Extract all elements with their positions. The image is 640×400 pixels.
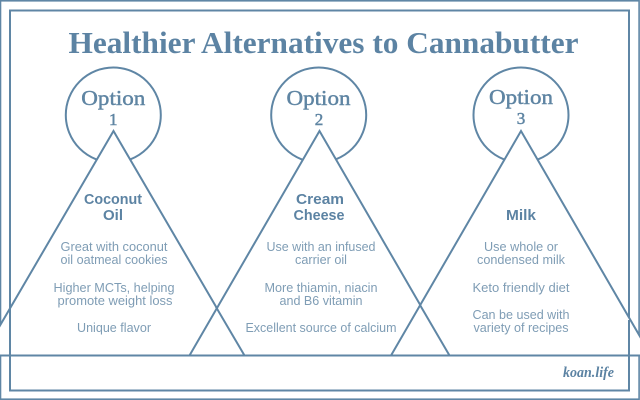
option 1 text: Great with coconut [60, 240, 168, 254]
option 3 text [472, 240, 570, 335]
option 1 text: promote weight loss [58, 294, 172, 308]
option 1 right edge over triangle 2 [216, 307, 244, 356]
option 2 right edge over triangle 3 [420, 305, 450, 356]
option 2 text: Excellent source of calcium [246, 321, 396, 335]
option 2 triangle [190, 131, 450, 356]
option 3 label: 3 [517, 109, 525, 128]
option 1 label [81, 86, 146, 129]
option 3 text: Use whole or [484, 240, 558, 254]
option 1 label: Option [81, 86, 146, 110]
title: Healthier Alternatives to Cannabutter [68, 26, 578, 60]
panel: option 1 [0, 68, 244, 356]
option 3 label: Option [489, 85, 554, 109]
option 2 label: 2 [315, 110, 323, 129]
option 3 text: condensed milk [477, 253, 566, 267]
icon: option 2 circle [271, 68, 366, 162]
option 3 text: variety of recipes [474, 321, 568, 335]
option 2 label: Option [286, 86, 351, 110]
option 1 text: Unique flavor [77, 321, 151, 335]
option 2 heading: Cheese [294, 208, 344, 224]
panel: option 2 [190, 68, 450, 356]
option 1 heading: Coconut [84, 192, 142, 208]
option 2 label [286, 86, 351, 129]
icon: option 3 circle [474, 68, 568, 162]
option 3 text: Keto friendly diet [472, 281, 570, 295]
option 1 text [54, 240, 175, 335]
brand: koan.life [563, 365, 614, 381]
option 3 label [489, 85, 554, 128]
option 2 text: and B6 vitamin [280, 294, 363, 308]
icon: option 1 circle [66, 68, 161, 162]
option 2 text: Use with an infused [266, 240, 376, 254]
option 1 triangle [0, 131, 244, 356]
option 2 heading: Cream [296, 192, 344, 208]
option 3 text: Can be used with [472, 308, 570, 322]
option 2 text: carrier oil [295, 253, 347, 267]
panel: option 3 [391, 68, 640, 356]
option 2 text: More thiamin, niacin [264, 281, 378, 295]
option 3 heading: Milk [506, 208, 537, 224]
option 1 heading [84, 192, 142, 224]
option 1 text: Higher MCTs, helping [54, 281, 175, 295]
option 1 text: oil oatmeal cookies [60, 253, 168, 267]
option 2 text [246, 240, 396, 335]
option 2 heading [294, 192, 344, 224]
option 3 triangle [391, 131, 640, 356]
option 1 heading: Oil [103, 208, 123, 224]
option 1 label: 1 [109, 110, 118, 129]
